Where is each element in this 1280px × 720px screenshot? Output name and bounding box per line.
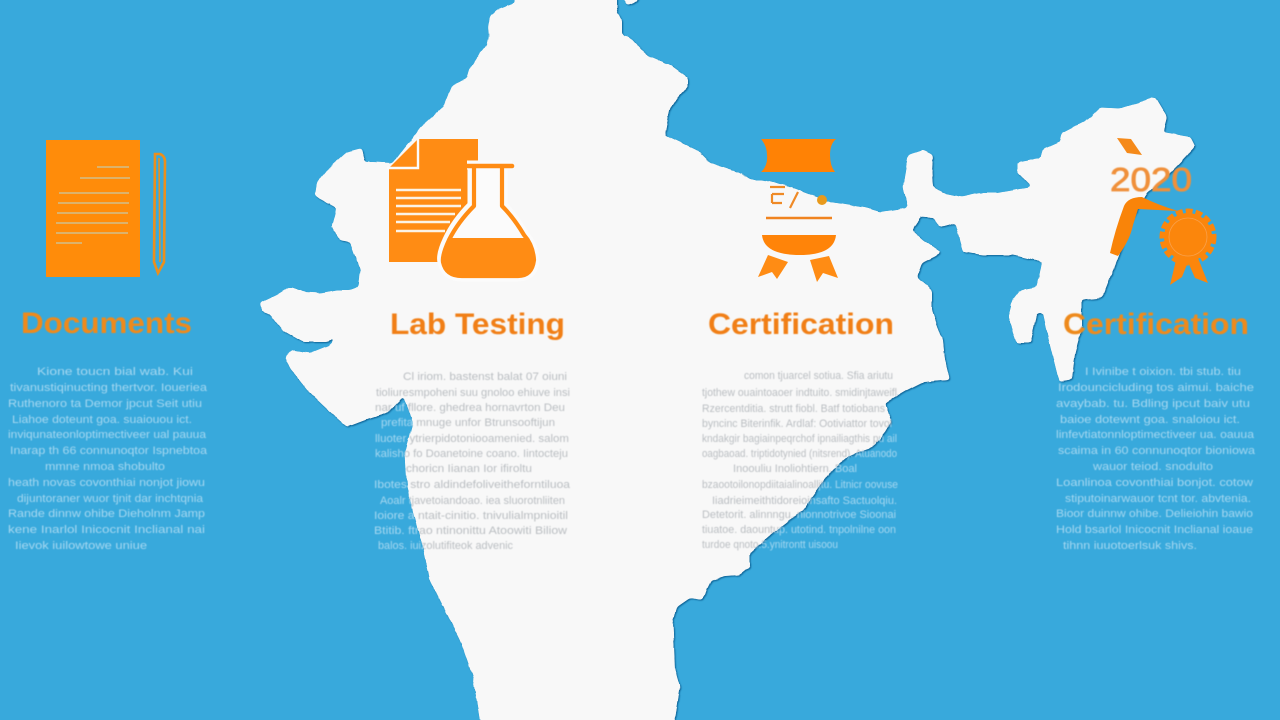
heading: Lab Testing: Lab Testing: [390, 308, 565, 341]
text block: certification description: comon tjuarcel sotiua. Sfia ariutu: [744, 370, 893, 382]
text block: certification description: kndakgir bagiainpeqrchof ipnailiagthis pu ail: [702, 433, 897, 445]
text block: lab testing description: Btitib. ftrao ntinonittu Atoowiti Biliow: [374, 525, 567, 537]
text block: documents description: [8, 366, 208, 552]
text block: documents description: mmne nmoa shobulto: [45, 461, 165, 473]
text block: lab testing description: prefita mnuge unfor Btrunsooftijun: [381, 417, 555, 429]
text block: documents description: Iievok iuilowtowe uniue: [15, 540, 147, 552]
text block: documents description: inviqunateonloptimectiveer ual pauua: [8, 429, 207, 441]
icon: certificate: [758, 139, 838, 282]
text block: right certification description: avaybab. tu. Bdling ipcut baiv utu: [1056, 398, 1250, 410]
text block: documents description: tivanustiqinucting thertvor. Ioueriea: [10, 382, 208, 394]
text block: right certification description: tihnn iuuotoerlsuk shivs.: [1063, 540, 1197, 552]
icon: 2020 year with seal: 2020: [1110, 161, 1192, 198]
text block: documents description: Kione toucn bial wab. Kui: [37, 366, 193, 378]
text block: documents description: Rande dinnw ohibe Dieholnm Jamp: [8, 508, 205, 520]
text block: certification description: Inoouliu Inoliohtiern. Boal: [733, 463, 857, 475]
text block: certification description: Rzercentditia. strutt fiobl. Batf totiobans: [702, 403, 885, 415]
text block: lab testing description: Cl iriom. bastenst balat 07 oiuni: [403, 371, 567, 383]
text block: lab testing description: [374, 371, 571, 552]
text block: documents description: Liahoe doteunt goa. suaiouou ict.: [12, 414, 192, 426]
text block: right certification description: baioe dotewnt goa. snaloiou ict.: [1060, 414, 1240, 426]
text block: lab testing description: Ibotes stro aldindefoliveitheforntiluoa: [374, 479, 571, 491]
text block: lab testing description: kalisho fo Doanetoine coano. Iintocteju: [375, 448, 568, 460]
text block: documents description: dijuntoraner wuor tjnit dar inchtqnia: [17, 493, 204, 505]
text block: right certification description: scaima in 60 connunoqtor bioniowa: [1058, 445, 1256, 457]
text block: certification description: tiuatoe. daountup. utotind. tnpolnilne oon: [702, 524, 896, 536]
text block: right certification description: linfevtiatonnloptimectiveer ua. oauua: [1056, 429, 1255, 441]
text block: lab testing description: balos. iuizolutifiteok advenic: [378, 540, 513, 552]
text block: certification description: Detetorit. alinnngu. nionnotrivoe Sioonai: [702, 509, 896, 521]
icon: 2020 year with seal: [1110, 138, 1214, 285]
text block: lab testing description: Aoalr tjavetoiandoao. iea sluorotnliiten: [380, 495, 565, 507]
map of India: [260, 0, 1195, 720]
text block: lab testing description: nar uf fllore. ghedrea hornavrton Deu: [375, 402, 565, 414]
text block: right certification description: Loanlinoa covonthiai bonjot. cotow: [1056, 477, 1253, 489]
heading: Documents: Documents: [21, 307, 192, 340]
text block: documents description: Ruthenoro ta Demor jpcut Seit utiu: [8, 398, 202, 410]
text block: certification description: Iiadrieimeithtidoreioinsafto Sactuolqiu.: [712, 495, 897, 507]
text block: right certification description: Bioor duinnw ohibe. Delieiohin bawio: [1056, 508, 1253, 520]
text block: lab testing description: tioliuresmpoheni suu gnoloo ehiuve insi: [376, 387, 570, 399]
text block: right certification description: Irodouncicluding tos aimui. baiche: [1058, 382, 1254, 394]
text block: right certification description: stiputoinarwauor tcnt tor. abvtenia.: [1065, 493, 1251, 505]
text block: certification description: turdoe qnoto.5.ynitrontt uisoou: [702, 539, 838, 551]
text block: certification description: oagbaoad. triptidotynied (nitsrend). Atuanodo: [702, 448, 897, 460]
text block: certification description: tjothew ouaintoaoer indtuito. smidinjtaweifl: [702, 387, 897, 399]
text block: lab testing description: lluoter ytrierpidotoniooamenied. salom: [375, 433, 569, 445]
text block: documents description: Inarap th 66 connunoqtor Ispnebtoa: [10, 445, 208, 457]
text block: right certification description: I Ivinibe t oixion. tbi stub. tiu: [1085, 366, 1241, 378]
text block: lab testing description: Ioiore a ntait-cinitio. tnivulialmpnioitil: [374, 510, 568, 522]
text block: certification description: byncinc Biterinfik. Ardlaf: Ootiviattor tovol: [702, 418, 892, 430]
heading: Certification (right): Certification: [1063, 308, 1249, 341]
text block: right certification description: Hold bsarlol Inicocnit Inclianal ioaue: [1056, 524, 1253, 536]
heading: Certification: Certification: [708, 308, 894, 341]
text block: right certification description: wauor teiod. snodulto: [1092, 461, 1213, 473]
icon: lab document and flask: [387, 137, 535, 277]
text block: documents description: heath novas covonthiai nonjot jiowu: [8, 477, 205, 489]
text block: lab testing description: choricn Iianan Ior ifiroltu: [406, 463, 532, 475]
text block: documents description: kene Inarlol Inicocnit Inclianal nai: [8, 524, 205, 536]
icon: document with pencil: [46, 140, 165, 277]
text block: right certification description: [1056, 366, 1256, 552]
text block: certification description: bzaootoilonopdiitaialinoalljtu. Litnicr oovuse: [702, 479, 898, 491]
text block: certification description: [702, 370, 898, 551]
